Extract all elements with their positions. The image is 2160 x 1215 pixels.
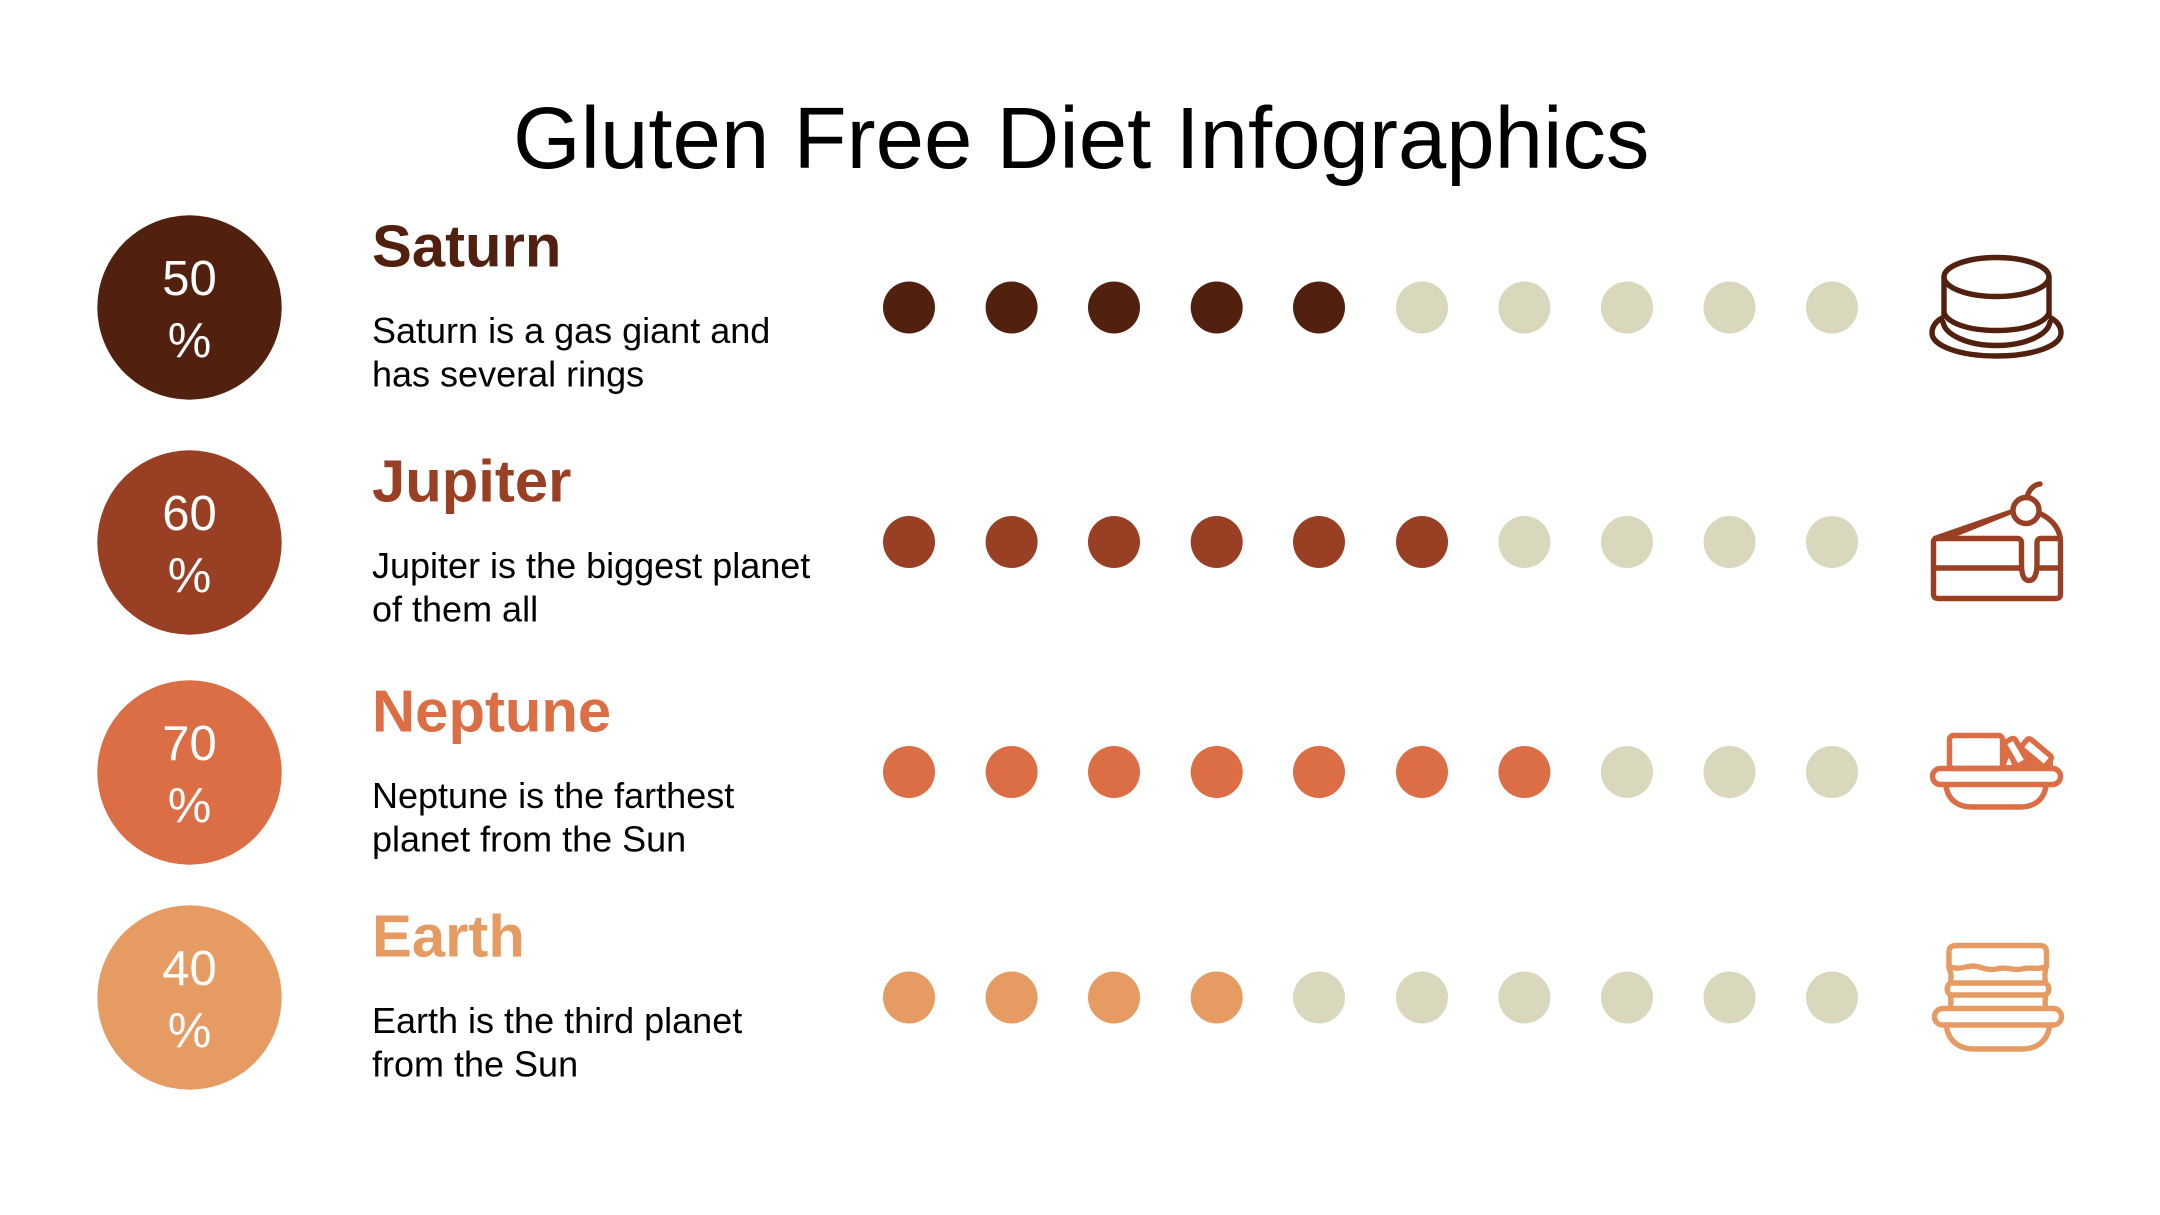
percent badge: 70%: 70 — [162, 717, 217, 771]
description: Earth: from the Sun — [372, 1044, 578, 1084]
icon: round cake on plate — [1932, 258, 2061, 356]
heading: Saturn: Saturn — [372, 212, 561, 280]
row: Neptune — [97, 678, 2060, 865]
title: Gluten Free Diet Infographics — [513, 90, 1649, 187]
percent badge: 60% — [97, 450, 282, 635]
dot scale: 5 of 10 — [883, 282, 1858, 334]
percent badge: 50% — [97, 215, 282, 400]
description: Neptune: planet from the Sun — [372, 818, 686, 860]
icon: bowl with food — [1932, 736, 2060, 807]
row: Earth — [97, 902, 2061, 1090]
dot scale: 4 of 10 — [883, 972, 1858, 1024]
heading: Jupiter: Jupiter — [372, 448, 571, 514]
icon: cake slice with cherry — [1934, 484, 2060, 598]
percent badge: 40%: 40 — [162, 942, 217, 996]
percent badge: 50%: % — [168, 314, 211, 368]
heading: Neptune: Neptune — [372, 678, 611, 744]
dot scale: 7 of 10 — [883, 746, 1858, 798]
description: Jupiter: of them all — [372, 588, 538, 630]
icon: layered cake in bowl — [1934, 946, 2062, 1049]
percent badge: 40% — [97, 905, 282, 1090]
heading: Earth: Earth — [372, 902, 525, 970]
description: Earth: Earth is the third planet — [372, 1000, 742, 1041]
row: Jupiter — [97, 448, 2060, 635]
dot scale: 6 of 10 — [883, 516, 1858, 568]
description: Saturn: has several rings — [372, 354, 644, 394]
row: Saturn — [97, 212, 2061, 400]
percent badge: 60%: % — [168, 549, 211, 603]
percent badge: 50%: 50 — [162, 252, 217, 306]
description: Jupiter: Jupiter is the biggest planet — [372, 545, 810, 586]
percent badge: 70% — [97, 680, 282, 865]
description: Saturn: Saturn is a gas giant and — [372, 310, 770, 351]
percent badge: 40%: % — [168, 1004, 211, 1058]
percent badge: 60%: 60 — [162, 487, 217, 541]
percent badge: 70%: % — [168, 779, 211, 833]
description: Neptune: Neptune is the farthest — [372, 775, 734, 816]
